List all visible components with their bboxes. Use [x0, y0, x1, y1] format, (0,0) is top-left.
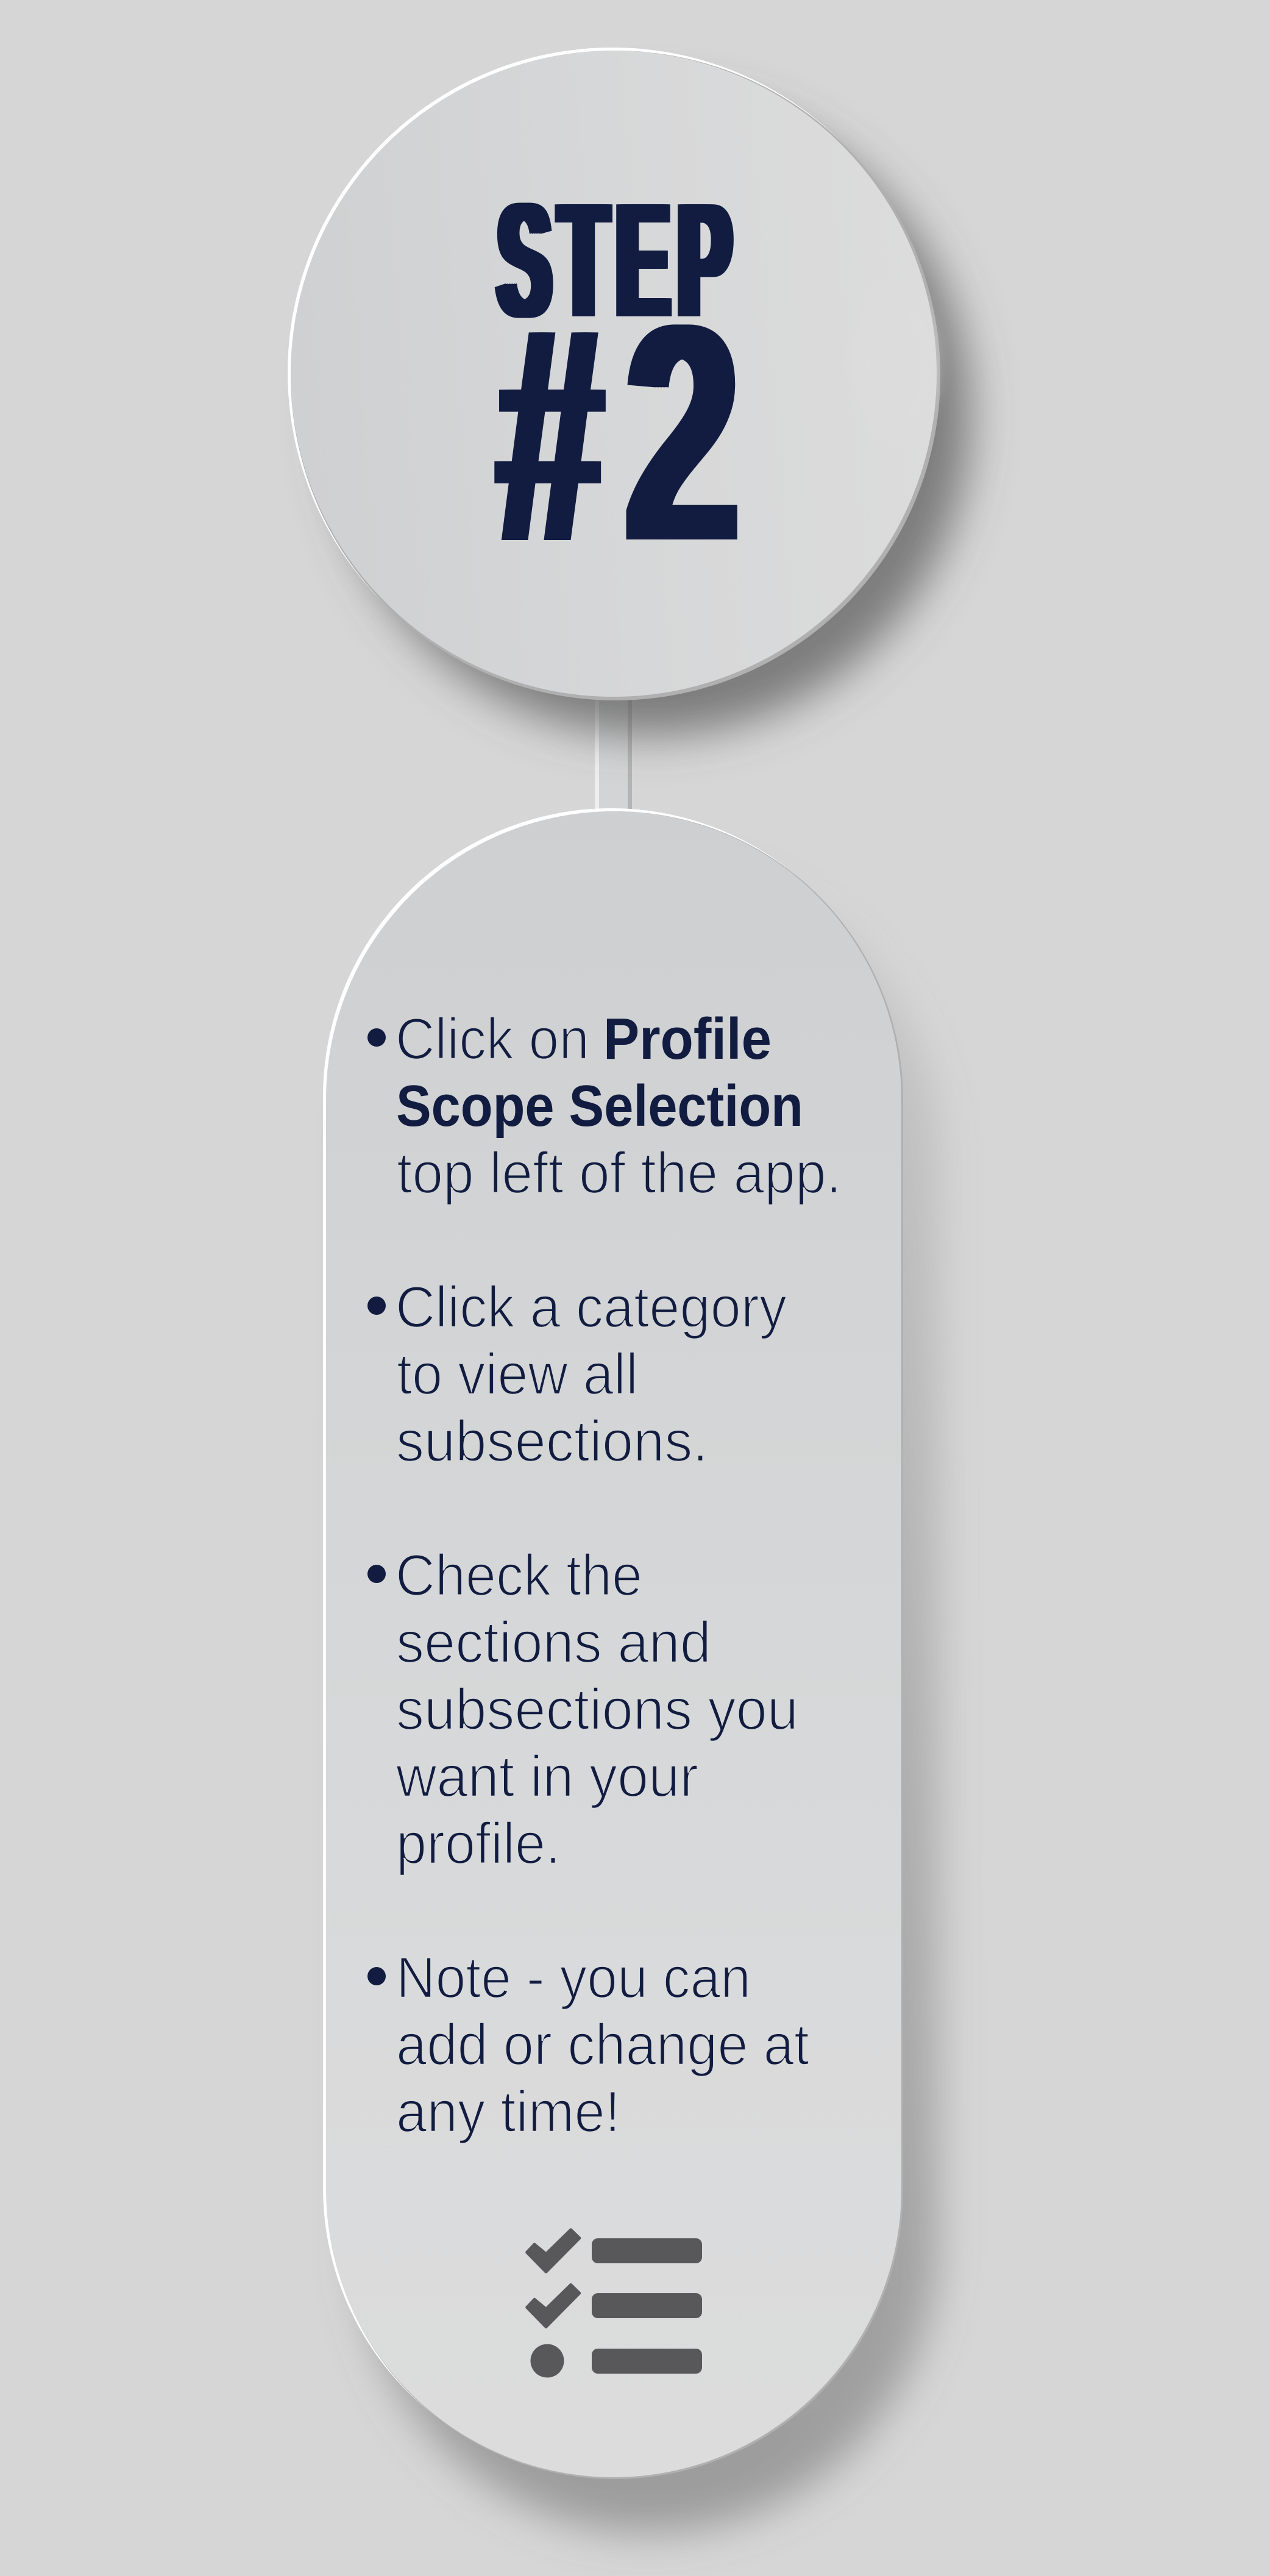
bullet 3: check the sections: sections and — [396, 1610, 711, 1675]
title: STEP #2 — [491, 169, 737, 605]
bullet 3: check the sections: profile. — [396, 1811, 561, 1876]
title number: 2: 2 — [619, 262, 732, 605]
title symbol: hash: # — [491, 264, 596, 605]
bullet 2: click a category: to view all — [397, 1342, 638, 1407]
bullet 2: click a category — [367, 1275, 787, 1474]
bullet 4: note — [367, 1945, 809, 2144]
title word: STEP: STEP — [492, 169, 734, 351]
bullet 2: click a category: Click a category — [396, 1275, 787, 1340]
step circle badge — [288, 48, 971, 736]
bullet 3: check the sections: Check the — [396, 1543, 642, 1608]
icon: checklist — [527, 2230, 702, 2377]
bullet 1: profile scope selection: top left of the app. — [397, 1140, 842, 1206]
bullet 1: profile scope selection: Scope Selection — [396, 1073, 803, 1139]
bullet 4: note: Note - you can — [396, 1945, 751, 2010]
connector between circle and pill — [595, 689, 632, 820]
bullet 4: note: any time! — [396, 2079, 620, 2144]
bullet 3: check the sections: want in your — [396, 1744, 698, 1809]
bullet 1: profile scope selection: Click on — [396, 1006, 589, 1072]
bullet 3: check the sections: subsections you — [396, 1677, 798, 1742]
bullet 3: check the sections — [367, 1543, 798, 1876]
bullet list text — [367, 1006, 842, 2144]
bullet 1: profile scope selection — [367, 1006, 842, 1206]
bullet 2: click a category: subsections. — [396, 1409, 708, 1474]
bullet 4: note: add or change at — [396, 2012, 809, 2077]
instruction pill panel — [323, 808, 938, 2533]
bullet 1: profile scope selection: Profile — [603, 1006, 772, 1072]
